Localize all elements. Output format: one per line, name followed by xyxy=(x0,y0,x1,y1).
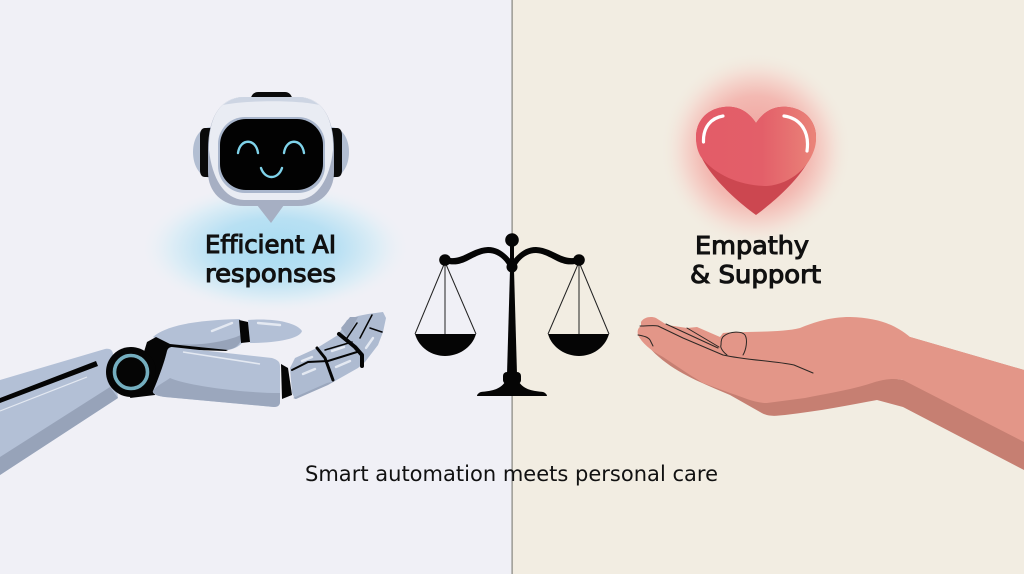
elbow joint xyxy=(130,337,228,398)
heading: Efficient AI responses xyxy=(205,230,336,288)
panel: human side background xyxy=(512,0,1024,574)
heading: Efficient AI responses: responses xyxy=(205,259,336,288)
robot eyes and smile xyxy=(238,142,304,177)
finger joints xyxy=(292,315,382,380)
heart highlights xyxy=(703,116,807,151)
scale strings xyxy=(415,262,609,334)
center divider xyxy=(512,0,513,574)
heading: Efficient AI responses: Efficient AI xyxy=(205,230,336,259)
hand line details xyxy=(638,324,813,373)
forearm xyxy=(153,347,280,407)
icon: heart xyxy=(696,107,816,215)
icon: robot head xyxy=(193,92,349,223)
caption: Smart automation meets personal care xyxy=(305,462,718,486)
heading: Empathy & Support: Empathy xyxy=(695,231,809,260)
icon: balance scale xyxy=(415,233,609,396)
hand silhouette xyxy=(290,312,386,399)
heading: Empathy & Support xyxy=(690,231,821,289)
icon: robot arm xyxy=(0,312,386,475)
heading: Empathy & Support: & Support xyxy=(690,260,821,289)
wrist xyxy=(281,364,292,399)
icon: human hand xyxy=(638,317,1024,470)
finger shading xyxy=(341,317,358,337)
blue glow xyxy=(139,182,411,314)
red glow xyxy=(660,52,852,248)
finger highlights xyxy=(212,323,373,374)
panel: AI side background xyxy=(0,0,512,574)
thumb xyxy=(153,319,244,351)
